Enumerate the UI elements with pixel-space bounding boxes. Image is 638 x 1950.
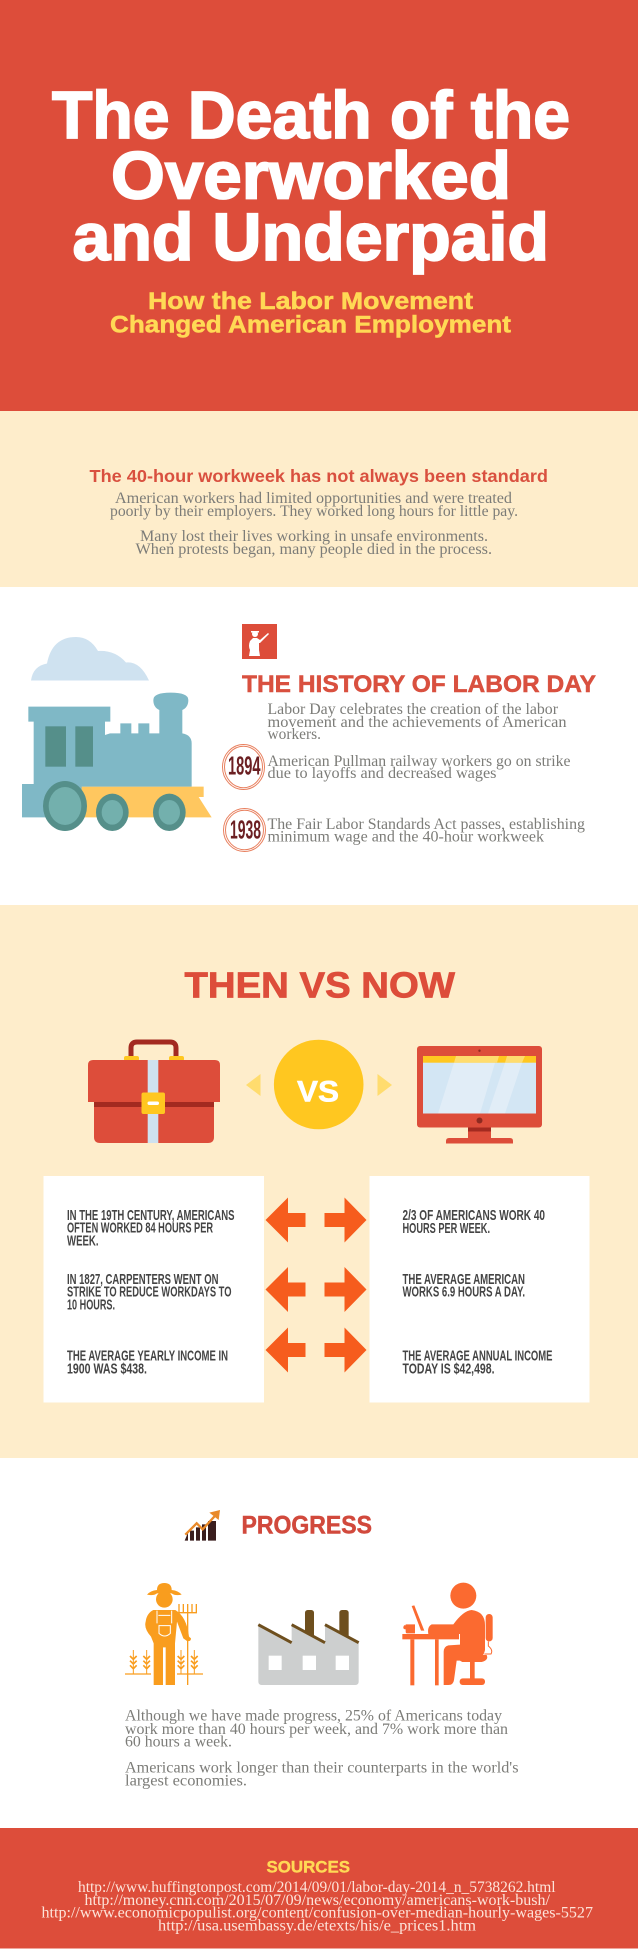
vs badge: [246, 1040, 392, 1129]
icon: farmer: [125, 1583, 203, 1685]
vs badge: VS: [297, 1076, 339, 1108]
icon: train: [22, 693, 212, 831]
heading: sources: SOURCES: [266, 1858, 350, 1877]
panel: then: 10 HOURS.: [67, 1297, 115, 1314]
panel: sources: [0, 1828, 638, 1948]
icon: factory: [258, 1610, 359, 1685]
panel: header: [0, 0, 638, 411]
subtitle: Changed American Employment: [110, 312, 511, 338]
panel: now: WORKS 6.9 HOURS A DAY.: [402, 1284, 525, 1301]
icon: growth chart: [185, 1510, 220, 1541]
intro text: poorly by their employers. They worked long hours for little pay.: [110, 503, 518, 520]
heading: history of labor day: THE HISTORY OF LABOR DAY: [242, 671, 596, 698]
source links: http://www.economicpopulist.org/content/confusion-over-median-hourly-wages-5527: [42, 1905, 593, 1922]
panel: then: [44, 1176, 264, 1402]
subtitle: How the Labor Movement: [148, 288, 473, 315]
timeline: 1938: 1938: [230, 814, 261, 844]
panel: intro: [0, 411, 638, 587]
progress text: Although we have made progress, 25% of Americans today: [125, 1708, 502, 1725]
history text: workers.: [268, 726, 321, 743]
history text: movement and the achievements of American: [268, 714, 566, 731]
icon: briefcase: [88, 1042, 220, 1143]
timeline: 1894: 1894: [228, 750, 261, 780]
timeline: 1894: [222, 744, 570, 790]
title: The Death of the: [52, 78, 570, 153]
panel: then: IN 1827, CARPENTERS WENT ON: [67, 1271, 218, 1288]
heading: then vs now: THEN VS NOW: [184, 964, 455, 1006]
progress text: 60 hours a week.: [125, 1734, 232, 1751]
title: Overworked: [111, 138, 511, 214]
panel: now: THE AVERAGE ANNUAL INCOME: [402, 1347, 552, 1364]
panel: now: [370, 1176, 590, 1402]
panel: history of labor day: [22, 624, 596, 852]
timeline: 1938: The Fair Labor Standards Act passes, establishing: [268, 816, 585, 833]
panel: then vs now: [0, 905, 638, 1458]
panel: then: WEEK.: [67, 1233, 98, 1250]
panel: then: STRIKE TO REDUCE WORKDAYS TO: [67, 1284, 232, 1301]
progress text: work more than 40 hours per week, and 7% work more than: [125, 1721, 508, 1738]
intro text: American workers had limited opportunities and were treated: [115, 490, 512, 507]
timeline: 1894: American Pullman railway workers go on strike: [268, 753, 570, 770]
panel: progress: [125, 1510, 518, 1789]
panel: now: TODAY IS $42,498.: [402, 1360, 494, 1377]
arrows: [266, 1198, 366, 1372]
source links: [42, 1879, 593, 1935]
history text: [268, 701, 566, 743]
intro text: When protests began, many people died in the process.: [136, 541, 492, 558]
panel: then: THE AVERAGE YEARLY INCOME IN: [67, 1347, 228, 1364]
subtitle: [110, 288, 511, 338]
intro text: [110, 490, 518, 558]
timeline: 1894: due to layoffs and decreased wages: [268, 765, 496, 782]
history text: Labor Day celebrates the creation of the labor: [268, 701, 559, 718]
progress text: largest economies.: [125, 1772, 247, 1789]
intro text: Many lost their lives working in unsafe environments.: [140, 528, 488, 545]
timeline: 1938: [224, 808, 585, 852]
title: [52, 78, 570, 275]
panel: then: 1900 WAS $438.: [67, 1360, 147, 1377]
source links: http://usa.usembassy.de/etexts/his/e_prices1.htm: [158, 1918, 477, 1935]
title: and Underpaid: [72, 200, 549, 275]
panel: then: IN THE 19TH CENTURY, AMERICANS: [67, 1207, 234, 1224]
panel: now: 2/3 OF AMERICANS WORK 40: [402, 1207, 545, 1224]
source links: http://money.cnn.com/2015/07/09/news/economy/americans-work-bush/: [84, 1892, 551, 1909]
panel: now: HOURS PER WEEK.: [402, 1220, 490, 1237]
progress text: [125, 1708, 518, 1789]
icon: cloud: [31, 637, 149, 680]
progress text: Americans work longer than their counterparts in the world's: [125, 1759, 518, 1776]
source links: http://www.huffingtonpost.com/2014/09/01/labor-day-2014_n_5738262.html: [78, 1879, 556, 1896]
panel: now: THE AVERAGE AMERICAN: [402, 1271, 525, 1288]
heading: progress: PROGRESS: [242, 1511, 372, 1539]
icon: monitor: [417, 1046, 542, 1144]
intro heading: The 40-hour workweek has not always been standard: [90, 466, 548, 486]
panel: then: OFTEN WORKED 84 HOURS PER: [67, 1220, 213, 1237]
icon: office worker: [402, 1583, 493, 1685]
icon: teacher badge: [242, 624, 277, 659]
timeline: 1938: minimum wage and the 40-hour workweek: [268, 828, 544, 846]
